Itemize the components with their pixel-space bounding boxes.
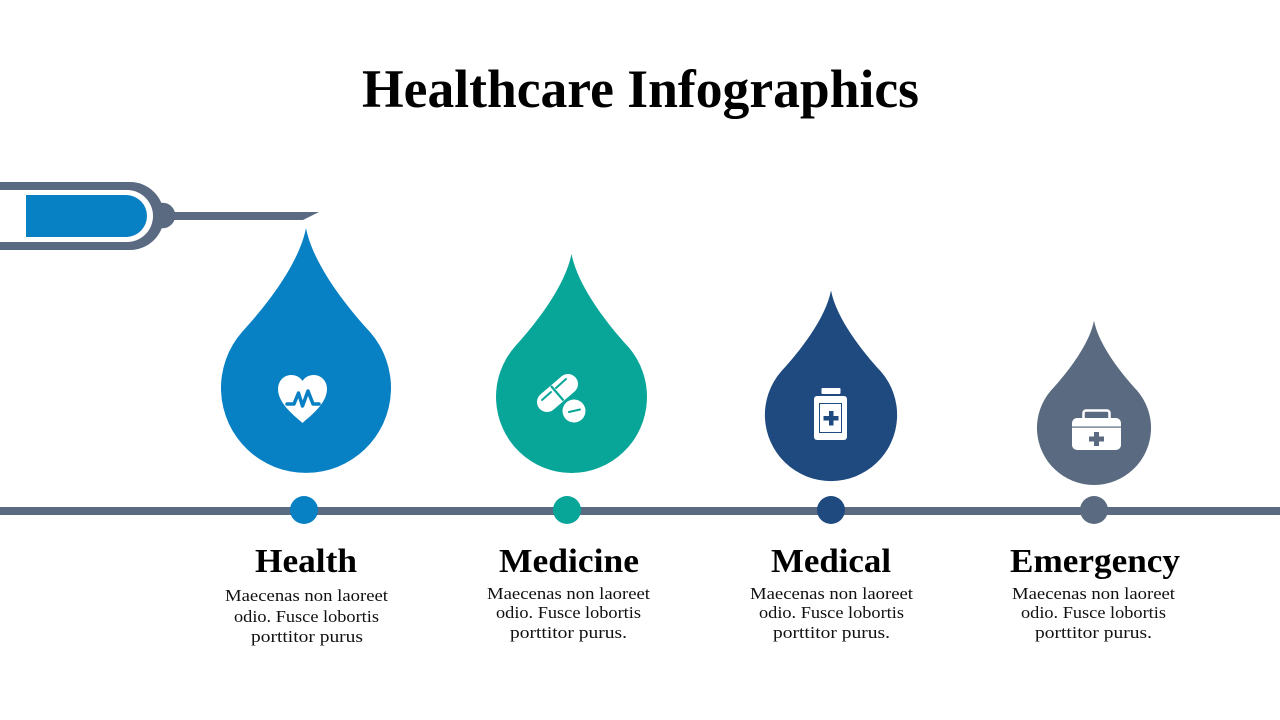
timeline marker: medicine	[553, 496, 581, 524]
text: health description	[225, 586, 388, 646]
timeline marker: health	[290, 496, 318, 524]
text: medical description: porttitor purus.	[773, 623, 890, 642]
text: medical description: Maecenas non laoreet	[750, 584, 913, 603]
label: emergency	[1010, 543, 1180, 642]
icon: syringe	[0, 182, 319, 250]
label: medical	[750, 543, 913, 642]
title: Healthcare Infographics	[362, 59, 919, 119]
drop: medicine	[496, 254, 647, 473]
heading: emergency: Emergency	[1010, 543, 1180, 580]
drop: emergency	[1037, 321, 1151, 485]
text: emergency description: Maecenas non laoreet	[1012, 584, 1175, 603]
label: medicine	[487, 543, 650, 642]
icon: medicine bottle	[814, 388, 847, 440]
text: health description: odio. Fusce lobortis	[234, 607, 379, 626]
text: medicine description: Maecenas non laoreet	[487, 584, 650, 603]
text: medicine description	[487, 584, 650, 642]
timeline marker: medical	[817, 496, 845, 524]
text: medical description	[750, 584, 913, 642]
drop: health	[221, 228, 391, 473]
text: emergency description: porttitor purus.	[1035, 623, 1152, 642]
text: emergency description	[1012, 584, 1175, 642]
text: medical description: odio. Fusce lobortis	[759, 603, 904, 622]
text: health description: Maecenas non laoreet	[225, 586, 388, 605]
heading: medicine: Medicine	[499, 543, 639, 580]
drop: medical	[765, 291, 897, 481]
icon: heart with pulse	[278, 375, 327, 423]
icon: pills	[542, 379, 586, 422]
icon: first aid kit	[1072, 410, 1121, 450]
heading: medical: Medical	[771, 543, 891, 580]
text: medicine description: porttitor purus.	[510, 623, 627, 642]
text: health description: porttitor purus	[251, 627, 363, 646]
heading: health: Health	[255, 543, 357, 580]
label: health	[225, 543, 388, 646]
timeline	[0, 507, 1280, 515]
text: emergency description: odio. Fusce lobortis	[1021, 603, 1166, 622]
text: medicine description: odio. Fusce lobortis	[496, 603, 641, 622]
timeline marker: emergency	[1080, 496, 1108, 524]
